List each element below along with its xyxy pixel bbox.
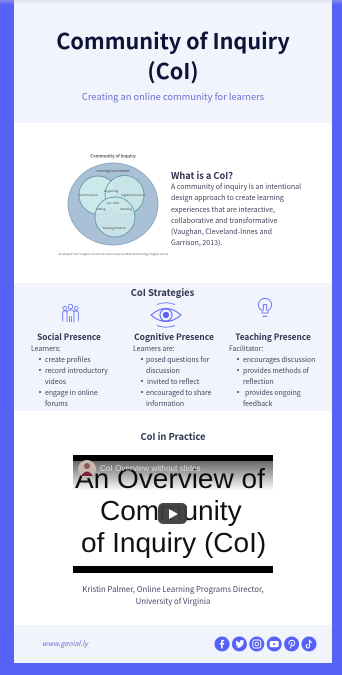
list: encouraged to share — [146, 386, 211, 396]
list: reflection — [243, 376, 274, 386]
circle labels: Social Presence — [78, 193, 98, 197]
letterbox top — [73, 455, 273, 461]
icon: instagram — [249, 636, 264, 652]
panel: header — [14, 0, 332, 123]
list — [133, 343, 212, 408]
channel avatar — [78, 460, 96, 478]
caption: University of Virginia — [136, 596, 210, 606]
video title: CoI Overview without slides — [100, 464, 201, 473]
slide text: of Inquiry (CoI) — [81, 527, 266, 558]
heading: Teaching Presence — [235, 331, 311, 343]
CoI venn diagram — [58, 152, 168, 256]
circle labels: Cognitive Presence — [121, 193, 145, 197]
paragraph: design approach to create learning — [171, 193, 284, 203]
list: Learners are: — [133, 343, 175, 353]
heading: CoI Strategies — [131, 284, 194, 298]
list: Learners: — [31, 343, 61, 353]
panel: CoI strategies — [14, 283, 332, 411]
paragraph — [171, 182, 301, 248]
teaching circle — [95, 197, 135, 237]
slide text: Community — [100, 495, 242, 526]
website link: www.genial.ly — [42, 639, 88, 649]
heading: CoI in practice: CoI in Practice — [140, 428, 206, 442]
paragraph: (Vaughan, Cleveland-Innes and — [171, 227, 272, 237]
video thumbnail — [73, 455, 273, 573]
circle labels: Supporting — [104, 189, 119, 193]
icon: facebook — [214, 636, 230, 652]
heading: Social Presence — [37, 331, 101, 343]
column: teaching presence — [229, 331, 315, 408]
list: encourages discussion — [243, 354, 315, 364]
letterbox bottom — [73, 566, 273, 573]
subtitle: Creating an online community for learners — [82, 89, 264, 103]
icon: tiktok — [302, 636, 316, 652]
list — [31, 343, 108, 408]
block: what is a CoI — [171, 168, 301, 248]
column: cognitive presence — [133, 331, 214, 408]
list: feedback — [243, 398, 272, 408]
list: provides ongoing — [245, 386, 301, 396]
list: videos — [45, 376, 66, 386]
list: create profiles — [45, 354, 91, 364]
circle labels — [78, 189, 145, 230]
list: provides methods of — [243, 364, 309, 374]
slide text: An Overview of — [75, 463, 265, 494]
list: invited to reflect — [147, 376, 199, 386]
title: Community of Inquiry — [56, 25, 290, 56]
top shadow — [0, 0, 342, 5]
circle labels: Setting — [97, 207, 106, 211]
icon: light bulb — [258, 298, 272, 317]
paragraph: collaborative and transformative — [171, 216, 277, 226]
circle labels: Teaching Presence — [102, 226, 126, 230]
slide text — [75, 463, 266, 558]
icon: eye — [150, 302, 182, 328]
paragraph: A community of inquiry is an intentional — [171, 182, 301, 192]
title: (CoI) — [147, 55, 199, 86]
heading: What is a CoI? — [171, 168, 233, 182]
column: social presence — [31, 331, 108, 408]
list: posed questions for — [146, 354, 209, 364]
diagram title: Community of Inquiry — [90, 152, 136, 160]
panel: footer — [14, 625, 332, 663]
heading: Cognitive Presence — [134, 331, 214, 343]
list: Facilitator: — [229, 343, 263, 353]
caption — [82, 584, 264, 606]
play button — [158, 503, 187, 524]
list: record introductory — [45, 364, 108, 374]
icon: pinterest — [284, 636, 299, 652]
title — [56, 25, 290, 86]
list: information — [146, 398, 184, 408]
circle labels: CoI / Edits — [107, 201, 120, 205]
list: forums — [45, 398, 68, 408]
play triangle — [169, 508, 178, 518]
paragraph: Garrison, 2013). — [171, 238, 222, 248]
paragraph: experiences that are interactive, — [171, 205, 275, 215]
outer circle — [68, 163, 158, 245]
list: engage in online — [45, 386, 98, 396]
learning environment label: Learning Environment — [96, 168, 130, 173]
player gradient — [73, 461, 273, 491]
cognitive circle — [105, 176, 144, 214]
icon: youtube — [267, 636, 282, 652]
icon: twitter — [232, 636, 247, 652]
list — [229, 343, 315, 408]
circle labels: Selecting — [120, 207, 132, 211]
icon: people — [62, 304, 79, 322]
social circle — [79, 176, 117, 214]
caption: Kristin Palmer, Online Learning Programs Director, — [82, 584, 264, 594]
social icons — [214, 636, 316, 652]
list: discussion — [146, 364, 180, 374]
